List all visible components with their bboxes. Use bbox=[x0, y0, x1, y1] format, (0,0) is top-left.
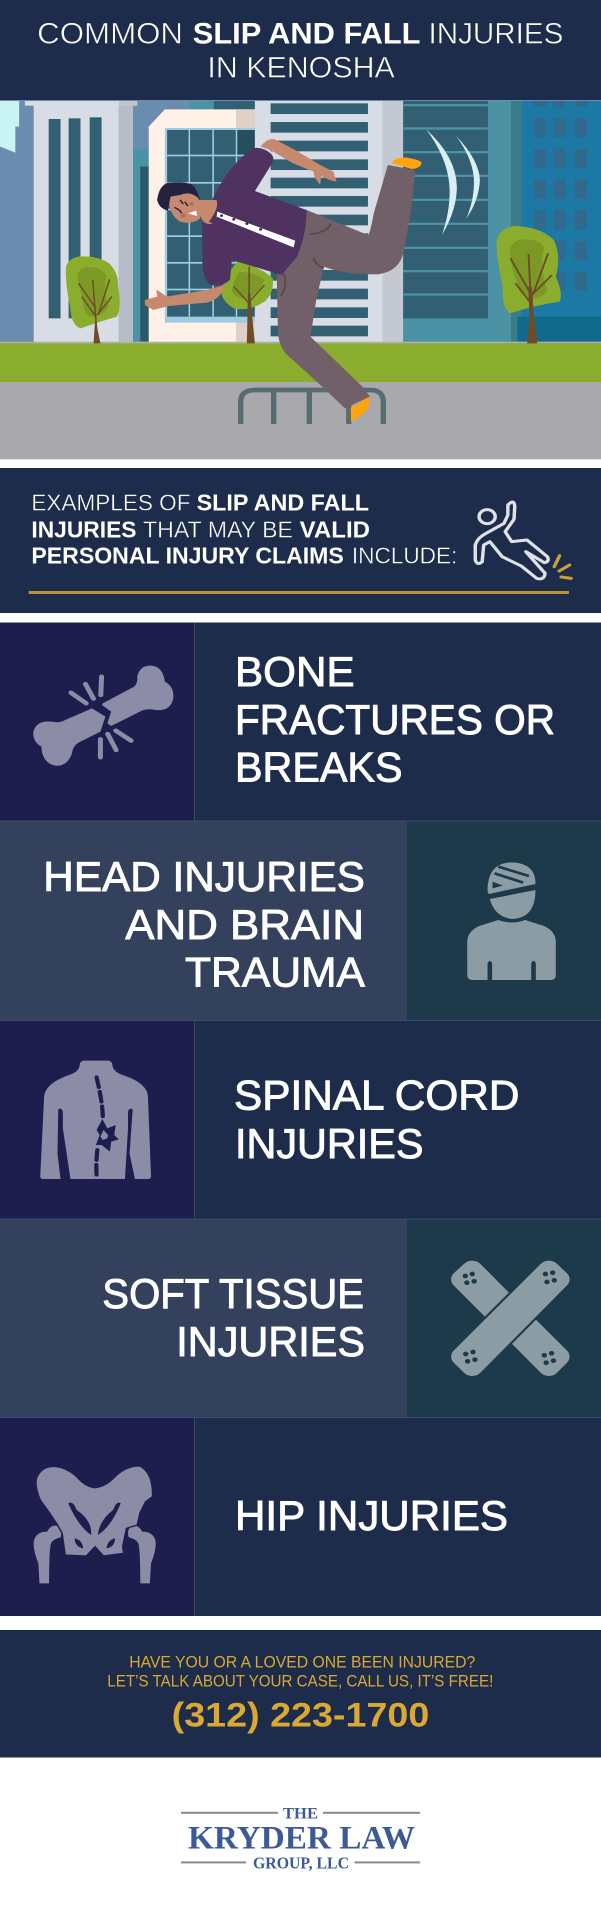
railing bbox=[241, 390, 383, 424]
building: slatted tower bbox=[255, 101, 403, 343]
label bbox=[102, 1270, 365, 1365]
panel: bone fractures bbox=[0, 622, 601, 821]
intro text bbox=[31, 490, 457, 569]
title bbox=[0, 0, 601, 100]
trousers bbox=[277, 165, 415, 408]
CTA text bbox=[107, 1652, 493, 1690]
tree: middle bbox=[221, 262, 273, 343]
phone number: (312) 223-1700 bbox=[172, 1697, 429, 1735]
label: AND BRAIN bbox=[125, 901, 364, 948]
logo: The Kryder Law Group, LLC: THE bbox=[283, 1806, 318, 1823]
title: IN KENOSHA bbox=[207, 52, 395, 85]
icon: broken bone bbox=[33, 666, 173, 766]
icon: bandaged head bbox=[467, 862, 556, 980]
icon tile bbox=[407, 1219, 601, 1418]
label bbox=[235, 648, 555, 791]
label: FRACTURES OR bbox=[235, 696, 555, 743]
grass bbox=[0, 343, 601, 382]
icon: person slipping bbox=[475, 502, 571, 579]
motion lines bbox=[426, 129, 480, 235]
shirt placket bbox=[217, 212, 295, 247]
icon tile bbox=[0, 1020, 194, 1219]
icon: injured spine bbox=[40, 1061, 151, 1179]
illustration: man slipping on city sidewalk bbox=[0, 100, 601, 459]
intro text: EXAMPLES OF bbox=[31, 490, 191, 516]
icon tile bbox=[407, 821, 601, 1020]
panel: spinal cord injuries bbox=[0, 1020, 601, 1219]
icon tile bbox=[0, 1418, 194, 1616]
label bbox=[234, 1071, 519, 1167]
building: blue tower bbox=[517, 101, 601, 343]
panel: intro banner bbox=[0, 468, 601, 613]
label: HEAD INJURIES bbox=[43, 853, 365, 900]
panel: hip injuries bbox=[0, 1418, 601, 1616]
panel: call to action bbox=[0, 1630, 601, 1758]
intro text: INJURIES bbox=[31, 516, 136, 542]
label: SOFT TISSUE bbox=[102, 1270, 364, 1317]
sidewalk bbox=[0, 382, 601, 459]
title: COMMON bbox=[37, 17, 183, 50]
icon: pelvis bbox=[34, 1466, 156, 1583]
building: left tower bbox=[25, 101, 137, 343]
label: BREAKS bbox=[235, 744, 402, 791]
man falling bbox=[145, 139, 422, 422]
title: SLIP AND FALL bbox=[193, 17, 420, 50]
logo: The Kryder Law Group, LLC: GROUP, LLC bbox=[253, 1853, 349, 1872]
neck bbox=[195, 200, 217, 224]
intro text: PERSONAL INJURY CLAIMS bbox=[31, 543, 344, 569]
CTA text: HAVE YOU OR A LOVED ONE BEEN INJURED? bbox=[129, 1652, 475, 1671]
label: INJURIES bbox=[235, 1120, 424, 1167]
label: TRAUMA bbox=[185, 949, 365, 996]
shoe: planted bbox=[351, 395, 370, 422]
panel: soft tissue injuries bbox=[0, 1219, 601, 1418]
label: SPINAL CORD bbox=[234, 1071, 519, 1118]
icon: crossed bandages bbox=[462, 1270, 559, 1367]
shoe: raised bbox=[392, 158, 422, 169]
arm: raised bbox=[261, 139, 337, 185]
icon tile bbox=[0, 622, 194, 821]
intro text: SLIP AND FALL bbox=[197, 490, 369, 516]
logo: The Kryder Law Group, LLC: KRYDER LAW bbox=[188, 1820, 415, 1856]
shirt bbox=[202, 148, 307, 285]
head bbox=[157, 182, 201, 223]
label: HIP INJURIES bbox=[235, 1492, 508, 1539]
gold divider bbox=[29, 591, 569, 594]
tree: right bbox=[497, 226, 561, 343]
intro text: INCLUDE: bbox=[352, 543, 457, 569]
logo: The Kryder Law Group, LLC bbox=[181, 1806, 420, 1872]
building: cream tower bbox=[149, 109, 255, 343]
intro text: VALID bbox=[300, 516, 370, 542]
CTA text: LET’S TALK ABOUT YOUR CASE, CALL US, IT’S FREE! bbox=[107, 1671, 493, 1690]
building: teal tower bbox=[403, 101, 521, 343]
title: INJURIES bbox=[428, 17, 563, 50]
label bbox=[43, 853, 365, 996]
panel: head injuries bbox=[0, 821, 601, 1020]
label: BONE bbox=[235, 648, 355, 695]
tree: left bbox=[66, 256, 120, 343]
arm: lowered bbox=[145, 285, 224, 310]
label: INJURIES bbox=[176, 1318, 365, 1365]
intro text: THAT MAY BE bbox=[143, 516, 293, 542]
